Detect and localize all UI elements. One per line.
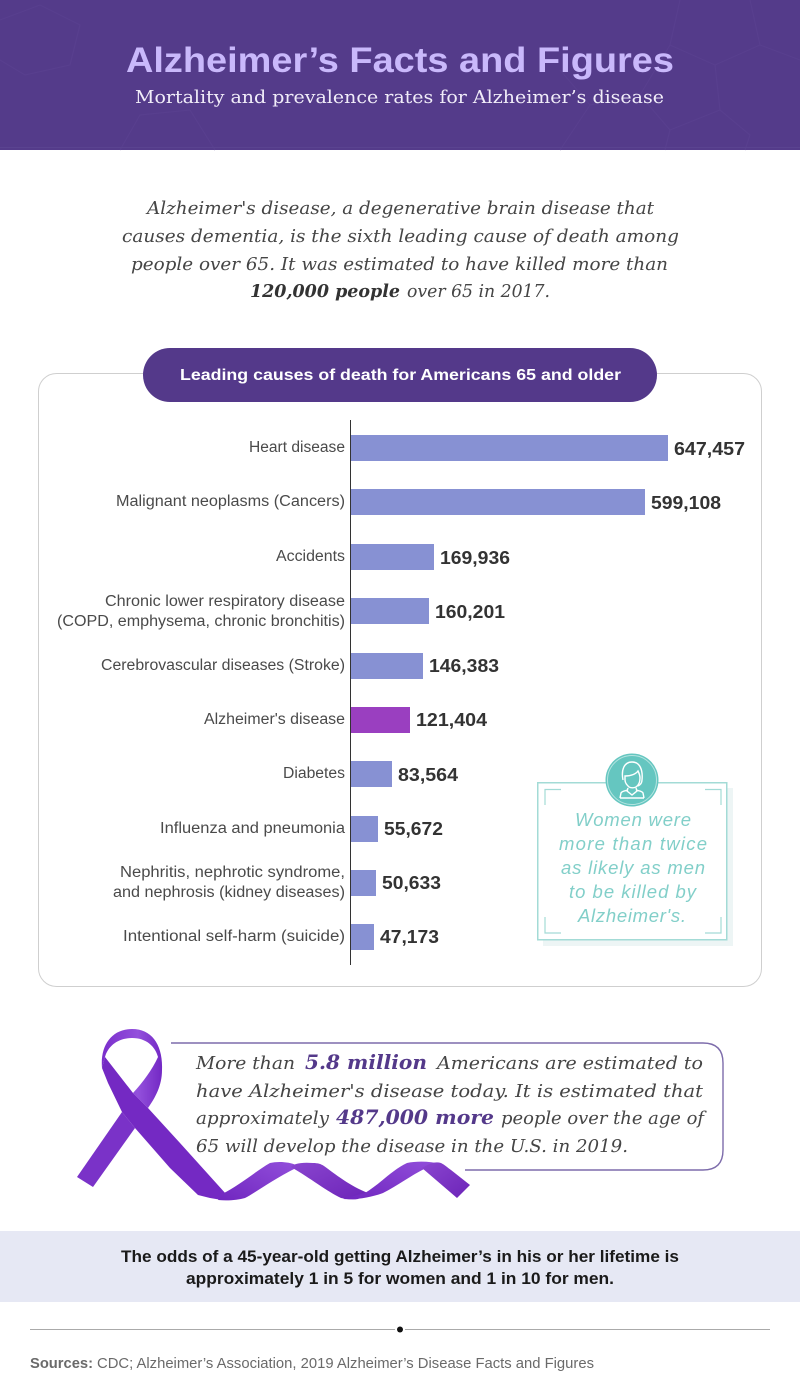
callout text: to be killed by [569, 881, 698, 902]
intro paragraph: people over 65. It was estimated to have killed more than [131, 254, 668, 275]
odds band [0, 1231, 800, 1302]
chart labels: Accidents [276, 548, 345, 565]
chart values: 169,936 [440, 548, 510, 568]
divider [30, 1324, 770, 1334]
chart labels: Nephritis, nephrotic syndrome, [120, 864, 345, 881]
chart labels: Intentional self-harm (suicide) [123, 928, 345, 945]
chart labels: Diabetes [283, 765, 345, 782]
intro paragraph: causes dementia, is the sixth leading cause of death among [122, 226, 679, 247]
chart values: 160,201 [435, 602, 505, 622]
chart labels [57, 439, 345, 945]
icon: purple ribbon [77, 1029, 470, 1200]
callout: women [538, 754, 733, 946]
chart values: 599,108 [651, 493, 721, 513]
chart labels: Chronic lower respiratory disease [105, 593, 345, 610]
chart values: 50,633 [382, 873, 441, 893]
intro paragraph: 120,000 people [250, 281, 400, 302]
callout text: Women were [575, 809, 691, 830]
chart labels: (COPD, emphysema, chronic bronchitis) [57, 613, 345, 630]
callout text: more than twice [559, 833, 707, 854]
callout text: as likely as men [561, 857, 705, 878]
title: Alzheimer’s Facts and Figures [126, 41, 674, 80]
chart labels: and nephrosis (kidney diseases) [113, 884, 345, 901]
panel heading pill [143, 348, 657, 402]
chart values [380, 439, 745, 947]
prevalence text: 65 will develop the disease in the U.S. in 2019. [196, 1136, 628, 1157]
prevalence text [195, 1050, 707, 1157]
chart values: 647,457 [674, 439, 745, 459]
chart labels: Alzheimer's disease [204, 711, 345, 728]
chart values: 121,404 [416, 710, 487, 730]
icon: woman [606, 754, 658, 806]
chart values: 83,564 [398, 765, 458, 785]
prevalence text: More than [195, 1053, 295, 1074]
callout: prevalence bubble [171, 1043, 723, 1170]
chart labels: Influenza and pneumonia [160, 820, 345, 837]
panel heading pill: Leading causes of death for Americans 65 and older [180, 367, 621, 384]
odds text: The odds of a 45-year-old getting Alzheimer’s in his or her lifetime is [121, 1248, 679, 1266]
intro paragraph: Alzheimer's disease, a degenerative brain disease that [145, 198, 655, 219]
sources: Sources: [30, 1355, 93, 1372]
chart values: 146,383 [429, 656, 499, 676]
chart labels: Cerebrovascular diseases (Stroke) [101, 657, 345, 674]
chart values: 47,173 [380, 927, 439, 947]
prevalence text: 5.8 million [305, 1050, 427, 1074]
callout text [559, 809, 707, 926]
odds text: approximately 1 in 5 for women and 1 in 10 for men. [186, 1270, 614, 1288]
header banner [0, 0, 800, 150]
chart values: 55,672 [384, 819, 443, 839]
prevalence text: 487,000 more [336, 1105, 494, 1129]
chart labels: Heart disease [249, 439, 345, 456]
subtitle: Mortality and prevalence rates for Alzheimer’s disease [135, 87, 664, 108]
intro paragraph [122, 198, 679, 302]
prevalence text: have Alzheimer's disease today. It is estimated that [196, 1081, 704, 1102]
callout text: Alzheimer's. [577, 905, 686, 926]
sources: CDC; Alzheimer’s Association, 2019 Alzheimer’s Disease Facts and Figures [97, 1355, 594, 1372]
intro paragraph: over 65 in 2017. [407, 281, 550, 302]
prevalence text: approximately [196, 1108, 330, 1129]
prevalence text: people over the age of [501, 1108, 707, 1129]
prevalence text: Americans are estimated to [435, 1053, 703, 1074]
odds text [121, 1248, 679, 1288]
panel: leading causes of death [38, 348, 762, 986]
chart labels: Malignant neoplasms (Cancers) [116, 493, 345, 510]
chart bars [351, 435, 668, 950]
bar chart [57, 420, 745, 965]
